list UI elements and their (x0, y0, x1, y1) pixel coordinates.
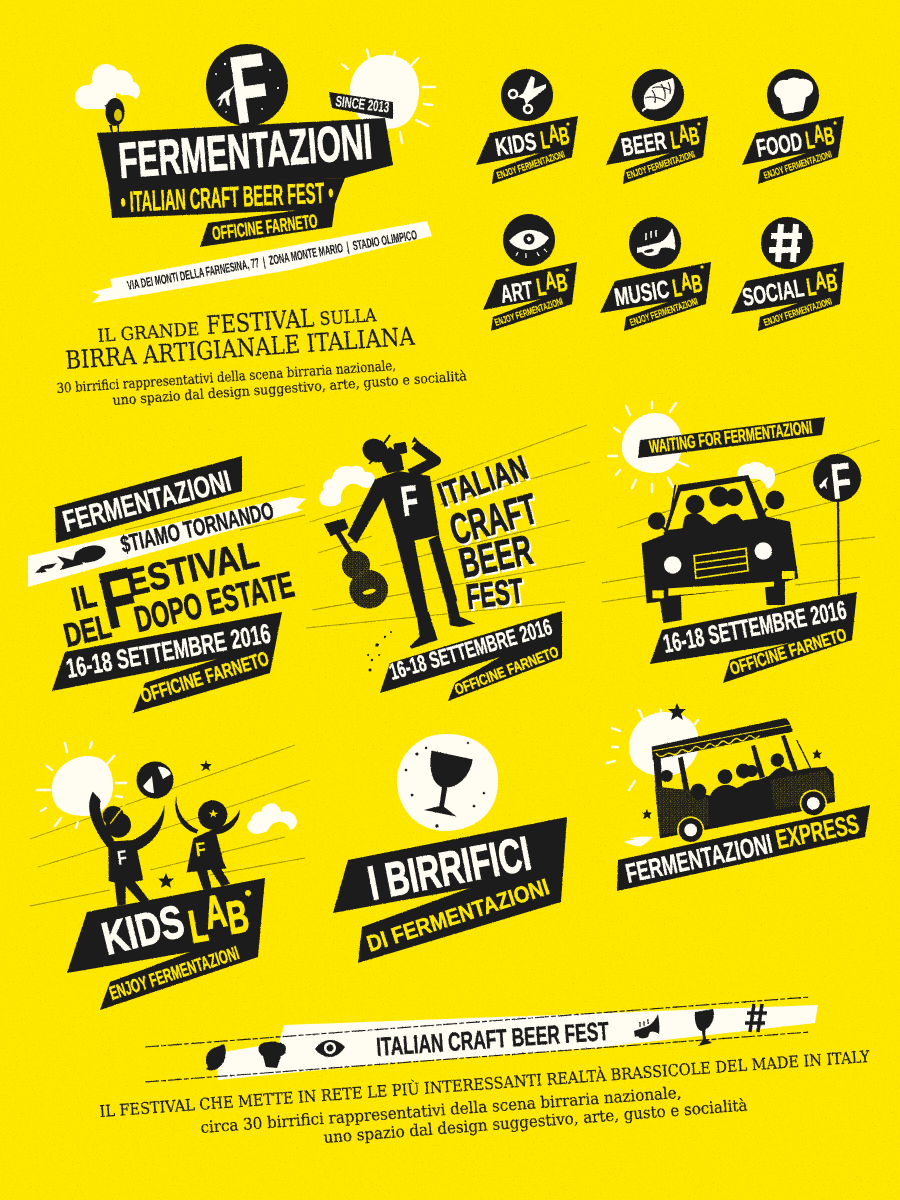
figure: man drinking: F (398, 476, 421, 525)
text: closing description (99, 1046, 871, 1147)
heading: il grande festival: IL GRANDE (97, 319, 200, 347)
badge: food lab: L (804, 125, 823, 155)
banner: date and venue: OFFICINE FARNETO (138, 648, 272, 708)
headline: il festival del dopo estate: ESTIVAL (123, 534, 263, 605)
banner: Officine Farneto: OFFICINE FARNETO (211, 211, 319, 245)
banner: Fermentazioni (97, 113, 393, 189)
panel: poster festival dopo estate (28, 456, 306, 713)
banner: date and venue: OFFICINE FARNETO (727, 624, 849, 679)
headline: italian craft beer fest: CRAFT (445, 485, 542, 555)
banner: date and venue (380, 611, 562, 701)
badge: music lab (600, 217, 711, 331)
banner: kids lab: A (200, 884, 230, 939)
headline: italian craft beer fest: BEER (457, 528, 538, 589)
icon: glass (695, 1009, 714, 1046)
banner: Italian craft beer fest (108, 177, 345, 219)
panel: poster kids lab (30, 742, 310, 1010)
icon: eye (315, 1040, 345, 1057)
banner: i birrifici: DI FERMENTAZIONI (364, 873, 552, 957)
icon: sun with rays (342, 50, 435, 143)
banner: date and venue: 16-18 SETTEMBRE 2016 (386, 614, 555, 685)
badge: beer lab: ENJOY FERMENTAZIONI (626, 149, 697, 182)
badge: social lab: L (805, 272, 824, 302)
badge: beer lab: A (676, 119, 691, 149)
badge: kids lab (476, 69, 578, 184)
bottom brush strip (145, 997, 818, 1082)
headline: il festival del dopo estate (60, 534, 298, 654)
since 2013 tag (329, 92, 393, 119)
icon: F road sign (813, 452, 861, 595)
headline: italian craft beer fest: CRAFT (447, 487, 544, 557)
icon: cloud (75, 64, 140, 113)
badge: social lab: ENJOY FERMENTAZIONI (763, 296, 834, 329)
banner: kids lab: ENJOY FERMENTAZIONI (107, 943, 242, 1005)
badge: art lab: L (535, 272, 554, 302)
headline: il festival del dopo estate: IL (68, 576, 100, 618)
address strip (92, 221, 432, 303)
headline: italian craft beer fest: FEST (464, 571, 526, 617)
badge: food lab: FOOD (754, 128, 804, 163)
badge: kids lab: L (539, 125, 558, 155)
badge: art lab: ART (499, 276, 535, 309)
figure: girl: F (194, 839, 207, 862)
badge: art lab: ENJOY FERMENTAZIONI (494, 296, 565, 329)
banner: Italian craft beer fest: • ITALIAN CRAFT BEER FEST • (120, 177, 334, 219)
heading: il grande festival: FESTIVAL (205, 304, 315, 340)
badge: food lab: B (822, 122, 836, 151)
brush strip: stiamo tornando (28, 485, 306, 587)
icon: sun (37, 742, 126, 828)
panel: poster italian craft beer fest (306, 425, 590, 701)
text: closing description: circa 30 birrifici rappresentativi della scena birraria nazionale, (200, 1083, 682, 1137)
banner: date and venue: OFFICINE FARNETO (452, 643, 561, 699)
headline: italian craft beer fest: FEST (466, 573, 528, 619)
badge: food lab (742, 69, 844, 184)
badge: kids lab: A (546, 119, 561, 149)
banner: date and venue (650, 592, 857, 683)
banner: kids lab (67, 878, 265, 1010)
icon: hop (204, 1044, 226, 1071)
icon: trumpet (634, 1014, 659, 1038)
text: intro description: 30 birrifici rappresentativi della scena birraria nazionale, (56, 358, 396, 397)
badge: kids lab: ENJOY FERMENTAZIONI (496, 149, 567, 182)
banner: i birrifici (333, 817, 567, 963)
icon: eye (503, 214, 555, 266)
badge: art lab (483, 214, 577, 331)
badge: social lab (731, 217, 844, 331)
headline: il festival del dopo estate: DEL (60, 607, 114, 654)
badge: music lab: B (690, 270, 704, 299)
badge: music lab: MUSIC (612, 275, 671, 312)
illustration: kids (89, 792, 240, 906)
brush strip: stiamo tornando: $TIAMO TORNANDO (118, 497, 276, 559)
figure: girl (175, 795, 240, 890)
spatter (367, 631, 392, 672)
icon: F badge: F (224, 34, 274, 143)
heading: il grande festival: SULLA (319, 305, 378, 330)
text: intro description (56, 358, 467, 409)
icon: F road sign: F (828, 452, 854, 510)
badge: social lab: SOCIAL (740, 274, 806, 312)
text: closing description: uno spazio dal design suggestivo, arte, gusto e socialità (323, 1095, 748, 1147)
badge: music lab: L (671, 273, 690, 303)
icon: cloud (319, 466, 375, 506)
banner: waiting (638, 417, 825, 458)
icon: small cloud (624, 837, 653, 846)
badge: art lab: B (554, 268, 569, 298)
icon: guitar (324, 518, 388, 609)
icon: cloud (737, 462, 775, 489)
badge: social lab: B (824, 268, 839, 298)
heading: il grande festival: BIRRA ARTIGIANALE ITALIANA (64, 322, 416, 375)
icon: star (642, 809, 652, 819)
badge: kids lab: B (557, 122, 571, 151)
badge: beer lab (606, 69, 708, 184)
badge: kids lab: KIDS (493, 128, 538, 162)
icon: cloud (247, 803, 297, 834)
badge: beer lab: L (669, 125, 688, 155)
banner: date and venue (52, 612, 282, 713)
panel: main logo (75, 34, 435, 303)
icon: star (668, 703, 686, 720)
icon: rocket (35, 543, 107, 573)
panel: poster fermentazioni express (607, 703, 870, 891)
strip title: ITALIAN CRAFT BEER FEST (375, 1016, 610, 1062)
banner: Officine Farneto (200, 205, 335, 247)
icon: star (812, 749, 822, 759)
headline: il festival del dopo estate: F (92, 551, 145, 646)
icon: hop (632, 69, 684, 121)
banner: i birrifici: I BIRRIFICI (364, 827, 535, 911)
badge: music lab: ENJOY FERMENTAZIONI (629, 296, 700, 329)
badge: music lab: A (679, 267, 693, 297)
banner: Fermentazioni: FERMENTAZIONI (60, 465, 234, 539)
icon: chef hat (767, 69, 819, 121)
banner: kids lab: KIDS (97, 894, 189, 965)
icon: F badge (206, 34, 288, 143)
badge: beer lab: B (687, 122, 701, 151)
badge: beer lab: BEER (619, 127, 668, 162)
badge: food lab: A (811, 119, 826, 149)
banner: kids lab: L (185, 897, 221, 953)
icon: sun (607, 710, 699, 790)
panel: poster waiting for fermentazioni (602, 402, 880, 683)
badge: social lab: A (813, 266, 828, 296)
illustration: bus (652, 718, 835, 844)
figure: boy (89, 792, 164, 906)
icon: sun (608, 402, 688, 492)
icon: bird (104, 98, 124, 134)
icon: scissors (501, 69, 553, 121)
icon: chef hat (259, 1041, 286, 1068)
icon: hashtag (761, 217, 813, 269)
banner: Fermentazioni (55, 456, 242, 543)
banner: date and venue: 16-18 SETTEMBRE 2016 (64, 618, 273, 684)
headline: italian craft beer fest: ITALIAN (433, 449, 533, 515)
headline: il festival del dopo estate: DOPO ESTATE (131, 563, 298, 640)
figure: man drinking (347, 434, 475, 649)
badge: food lab: ENJOY FERMENTAZIONI (763, 149, 834, 182)
figure: boy: F (116, 847, 128, 870)
since 2013 tag: SINCE 2013 (335, 93, 390, 117)
text: intro description: uno spazio dal design suggestivo, arte, gusto e socialità (112, 368, 467, 409)
address strip: VIA DEI MONTI DELLA FARNESINA, 77 | ZONA MONTE MARIO | STADIO OLIMPICO (126, 227, 418, 293)
icon: wine glass (397, 734, 498, 831)
headline: italian craft beer fest: ITALIAN (435, 451, 535, 517)
illustration: man with guitar (324, 434, 475, 649)
headline: italian craft beer fest: BEER (455, 526, 536, 587)
banner: kids lab: B (223, 889, 252, 944)
banner: fermentazioni express: FERMENTAZIONI (623, 829, 775, 889)
panel: poster i birrifici (333, 734, 567, 963)
banner: Fermentazioni: FERMENTAZIONI (116, 113, 374, 189)
illustration: car (642, 475, 798, 623)
headline: italian craft beer fest (433, 449, 544, 619)
icon: star (158, 873, 174, 888)
icon: beach ball (136, 762, 174, 798)
icon: trumpet (629, 217, 681, 269)
badge: art lab: A (543, 266, 558, 296)
icon: hashtag (745, 1004, 767, 1032)
icon: star (200, 760, 212, 771)
